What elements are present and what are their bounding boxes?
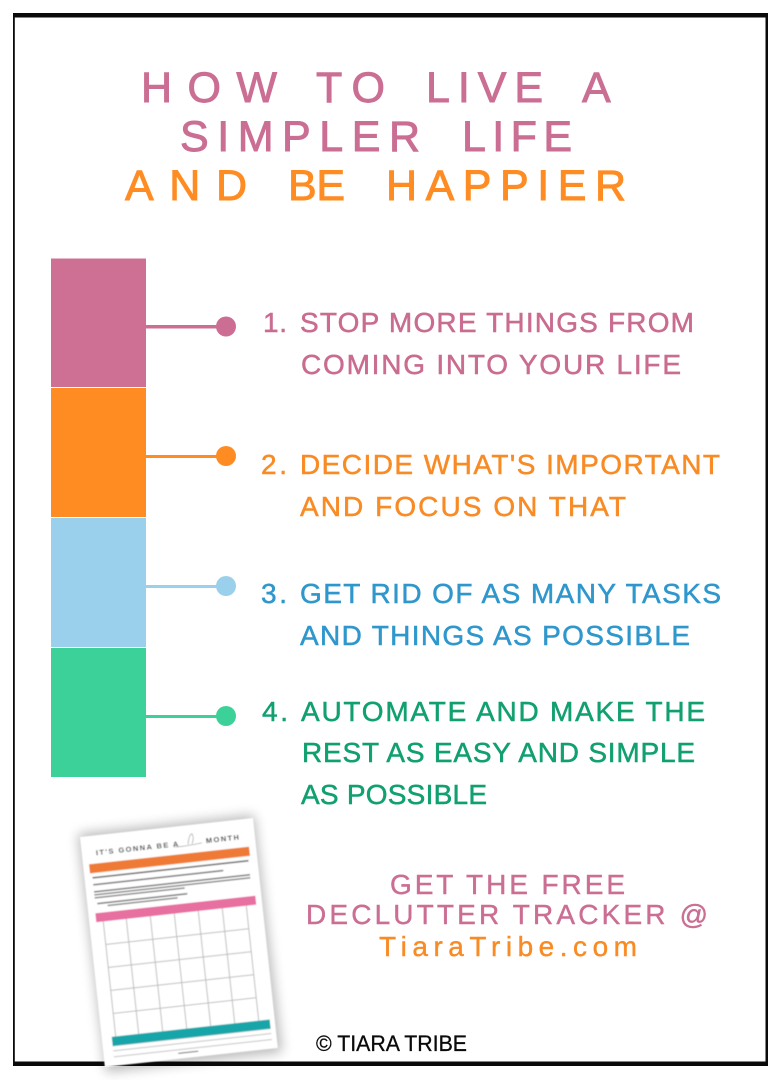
step 4 text: AS POSSIBLE [301, 779, 487, 810]
step 4 text [262, 696, 705, 810]
icon: declutter tracker worksheet: IT'S GONNA BE A [95, 839, 180, 857]
step 1 text [263, 307, 694, 380]
call to action: TiaraTribe.com [379, 931, 637, 962]
step 1 text: 1. [263, 307, 287, 338]
title: LIFE [462, 113, 572, 161]
title: HOW [141, 64, 277, 112]
connector 3 [146, 576, 236, 596]
icon: declutter tracker worksheet: MONTH [205, 833, 241, 845]
connector 1 [146, 316, 236, 336]
step 3 text: 3. [261, 578, 287, 609]
connector 4 [146, 706, 236, 726]
call to action: GET THE FREE [390, 869, 625, 900]
step 2 text: AND FOCUS ON THAT [300, 491, 626, 522]
connector 2 [146, 446, 236, 466]
title: A [582, 64, 611, 112]
title: HAPPIER [386, 162, 626, 210]
step 4 text: REST AS EASY AND SIMPLE [302, 737, 695, 768]
step 3 text [261, 578, 721, 651]
step 3 text: AND THINGS AS POSSIBLE [300, 620, 690, 651]
title: BE [288, 162, 345, 210]
step 1 text: STOP MORE THINGS FROM [300, 307, 694, 338]
step 2 text: DECIDE WHAT'S IMPORTANT [300, 449, 720, 480]
title: SIMPLER [180, 113, 420, 161]
title: AND [125, 162, 247, 210]
step 2 text [261, 449, 720, 522]
step 2 text: 2. [261, 449, 287, 480]
title [125, 64, 626, 210]
colour column: four stacked blocks [51, 258, 146, 777]
title: TO [316, 64, 385, 112]
step 3 text: GET RID OF AS MANY TASKS [300, 578, 721, 609]
step 1 text: COMING INTO YOUR LIFE [301, 349, 681, 380]
call to action: DECLUTTER TRACKER @ [306, 899, 708, 930]
step 4 text: 4. [262, 696, 288, 727]
copyright credit: © TIARA TRIBE [316, 1031, 467, 1056]
title: LIVE [426, 64, 543, 112]
step 4 text: AUTOMATE AND MAKE THE [301, 696, 705, 727]
call to action [306, 869, 708, 962]
icon: declutter tracker worksheet [78, 815, 282, 1072]
